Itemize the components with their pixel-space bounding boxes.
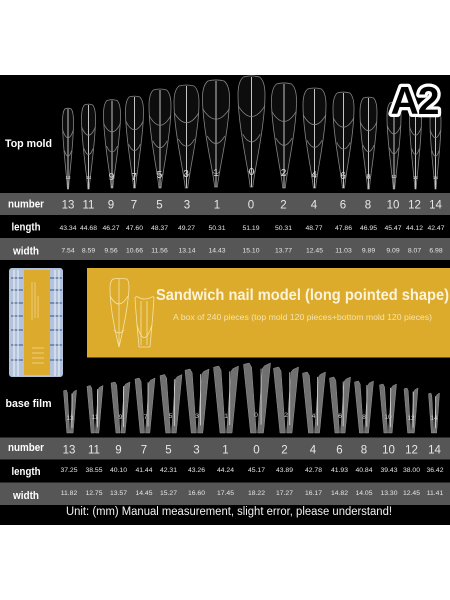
bottom table: length row: 42.78 — [305, 467, 322, 474]
top table: width row: width — [12, 246, 39, 258]
top table: number row: 8 — [365, 200, 371, 212]
base film nail numbers: 14 — [430, 415, 438, 422]
top mold nails — [62, 76, 441, 189]
top table: width row: 14.43 — [208, 248, 226, 254]
top table: width row: 8.59 — [82, 248, 95, 254]
top table: width row: 15.10 — [242, 248, 260, 254]
top table: width row: 6.98 — [429, 248, 443, 254]
bottom table: length row: 43.26 — [188, 467, 205, 474]
bottom table: length row: 38.00 — [403, 467, 420, 474]
base film nails — [64, 363, 440, 433]
top table: length row: 48.77 — [305, 225, 323, 232]
bottom table: length row: 41.44 — [135, 467, 153, 474]
base film nail numbers: 7 — [144, 414, 148, 421]
bottom table: number row: 11 — [88, 444, 100, 456]
banner subtitle: A box of 240 pieces (top mold 120 pieces+bottom mold 120 pieces) — [173, 313, 432, 322]
top table: number row: 2 — [280, 200, 287, 212]
top table: number row: 12 — [408, 200, 421, 212]
base film nail numbers — [66, 412, 438, 422]
top table: width row: 9.09 — [386, 248, 400, 254]
bottom table: number row: 10 — [382, 444, 395, 456]
top mold nail numbers: 9 — [109, 172, 115, 183]
bottom table: number row: 8 — [361, 444, 367, 456]
top table: length row: 46.27 — [102, 225, 120, 232]
base film nail numbers: 4 — [312, 413, 316, 420]
top table: width row: 13.77 — [275, 248, 292, 254]
bottom table: number row: 9 — [115, 444, 122, 456]
top mold nail numbers: 0 — [249, 167, 255, 178]
top table: width row: 11.03 — [335, 248, 352, 254]
top table: length row: 49.27 — [178, 225, 195, 232]
top table: number row: 3 — [184, 200, 190, 212]
A2 badge: A2 — [391, 80, 439, 123]
top mold nail numbers: 2 — [281, 168, 287, 179]
bottom table: length row: 41.93 — [331, 467, 348, 474]
top table: length row: 45.47 — [384, 225, 402, 232]
bottom table: length row: 36.42 — [426, 467, 444, 474]
top table: length row: 46.95 — [360, 225, 377, 232]
bottom table: length row: 45.17 — [248, 467, 265, 474]
label: base film: base film — [6, 398, 52, 410]
top table: width row: 7.54 — [61, 248, 75, 254]
top mold nail numbers: 7 — [131, 172, 137, 183]
base film nail numbers: 12 — [407, 415, 415, 422]
top table: length row — [12, 222, 445, 234]
top table: number row: 13 — [62, 200, 74, 212]
base film nail numbers: 8 — [362, 414, 366, 421]
bottom table: number row: 13 — [63, 444, 75, 456]
bottom table: number row: 12 — [405, 444, 418, 456]
bottom table: width row: 17.27 — [276, 490, 293, 497]
top table: width row — [0, 238, 450, 260]
bottom table: number row: 6 — [336, 444, 343, 456]
top table: length row: 50.31 — [275, 225, 292, 232]
base film nail numbers: 5 — [169, 413, 173, 420]
bottom table: width row: 15.27 — [160, 490, 177, 497]
bottom table: width row: 12.75 — [85, 490, 103, 497]
base film nail numbers: 6 — [338, 413, 342, 420]
bottom table: number row: number — [8, 442, 45, 454]
top table: length row: 47.60 — [126, 225, 143, 232]
gold banner — [87, 268, 450, 358]
bottom table: length row: 38.55 — [85, 467, 103, 474]
bottom table: width row: 14.82 — [331, 490, 348, 497]
top table: length row: 48.37 — [151, 225, 168, 232]
bottom table: width row: 16.60 — [188, 490, 205, 497]
base film nail numbers: 9 — [119, 414, 123, 421]
base film nail numbers: 1 — [224, 413, 228, 420]
bottom table: length row: 37.25 — [60, 467, 78, 474]
top mold nail numbers: 5 — [157, 170, 163, 181]
bottom table: length row: 44.24 — [217, 467, 234, 474]
top table: width row: 11.56 — [151, 248, 168, 254]
top table: length row: 50.31 — [208, 225, 226, 232]
top mold nail numbers: 3 — [183, 169, 189, 180]
top table: width row: 12.45 — [306, 248, 323, 254]
top table: width row: 10.66 — [126, 248, 143, 254]
top table: number row: 0 — [248, 200, 254, 212]
top table: width row: 9.56 — [104, 248, 118, 254]
top table: length row: 51.19 — [242, 225, 260, 232]
bottom table: width row: 16.17 — [305, 490, 322, 497]
top table: number row: 10 — [387, 200, 399, 212]
top table: width row: 8.07 — [408, 248, 421, 254]
top table: length row: 43.34 — [59, 225, 77, 232]
top table: width row: 13.14 — [178, 248, 196, 254]
label: Top mold: Top mold — [5, 138, 52, 150]
top mold nail numbers: 12 — [413, 175, 418, 180]
base film nail numbers: 2 — [284, 412, 288, 419]
top table: number row: number — [8, 198, 45, 210]
bottom table: number row: 2 — [281, 444, 288, 456]
base film nail numbers: 11 — [92, 414, 99, 421]
top mold nail numbers: 14 — [433, 175, 438, 180]
base film nail numbers: 10 — [384, 414, 392, 421]
top table: number row: 1 — [214, 200, 220, 212]
top table: length row: 44.68 — [80, 225, 97, 232]
top mold nail numbers: 13 — [65, 175, 71, 180]
top table: number row — [0, 193, 450, 215]
bottom table: length row: length — [12, 466, 41, 478]
base film nail numbers: 3 — [195, 413, 199, 420]
bottom table: width row: 18.22 — [248, 490, 265, 497]
bottom table: width row: 17.45 — [217, 490, 234, 497]
top table: number row: 7 — [131, 200, 137, 212]
top mold nail numbers — [65, 167, 438, 183]
bottom table: width row — [0, 482, 450, 505]
bottom table: length row: 40.84 — [355, 467, 373, 474]
bottom table: width row: 13.30 — [380, 490, 398, 497]
bottom table: number row: 7 — [141, 444, 147, 456]
top table: length row: 47.86 — [335, 225, 352, 232]
bottom table: number row: 4 — [310, 444, 317, 456]
top table: number row: 11 — [83, 200, 94, 212]
icon: nail outlines — [110, 278, 154, 347]
top mold nail numbers: 1 — [213, 168, 219, 179]
bottom table: number row: 14 — [428, 444, 441, 456]
bottom table: number row: 1 — [222, 444, 229, 456]
black background panel — [0, 75, 450, 525]
top table: number row: 5 — [156, 200, 163, 212]
footnote: Unit: (mm) Manual measurement, slight error, please understand! — [66, 506, 392, 518]
bottom table: width row: 12.45 — [403, 490, 420, 497]
top mold nail numbers: 11 — [87, 175, 92, 180]
top mold nail numbers: 4 — [311, 170, 317, 181]
bottom table: number row: 5 — [165, 444, 172, 456]
top table: number row: 6 — [340, 200, 346, 212]
top mold nail numbers: 10 — [391, 174, 397, 179]
bottom table: number row — [0, 438, 450, 460]
top table: number row: 9 — [108, 200, 114, 212]
bottom table: length row: 39.43 — [380, 467, 398, 474]
top table: number row: 14 — [429, 200, 442, 212]
top table: length row: 42.47 — [427, 225, 445, 232]
bottom table: number row: 3 — [193, 444, 200, 456]
bottom table: width row: 14.05 — [355, 490, 373, 497]
bottom table: length row: 40.10 — [110, 467, 127, 474]
bottom table: width row: 11.82 — [61, 490, 77, 497]
bottom table: width row: width — [12, 490, 39, 502]
top table: length row: length — [12, 222, 41, 234]
bottom table: number row: 0 — [253, 444, 260, 456]
top table: width row: 9.89 — [362, 248, 375, 254]
base film nail numbers: 13 — [66, 415, 74, 422]
top mold nail numbers: 6 — [340, 171, 346, 182]
base film nail numbers: 0 — [254, 412, 258, 419]
bottom table: width row: 11.41 — [427, 490, 443, 497]
top table: number row: 4 — [311, 200, 318, 212]
top mold nail numbers: 8 — [367, 174, 371, 181]
top table: length row: 44.12 — [406, 225, 423, 232]
bottom table: length row: 43.89 — [276, 467, 293, 474]
bottom table: width row: 13.57 — [110, 490, 127, 497]
bottom table: width row: 14.45 — [135, 490, 153, 497]
product box photo — [9, 268, 63, 377]
bottom table: length row — [12, 466, 444, 478]
bottom table: length row: 42.31 — [160, 467, 177, 474]
